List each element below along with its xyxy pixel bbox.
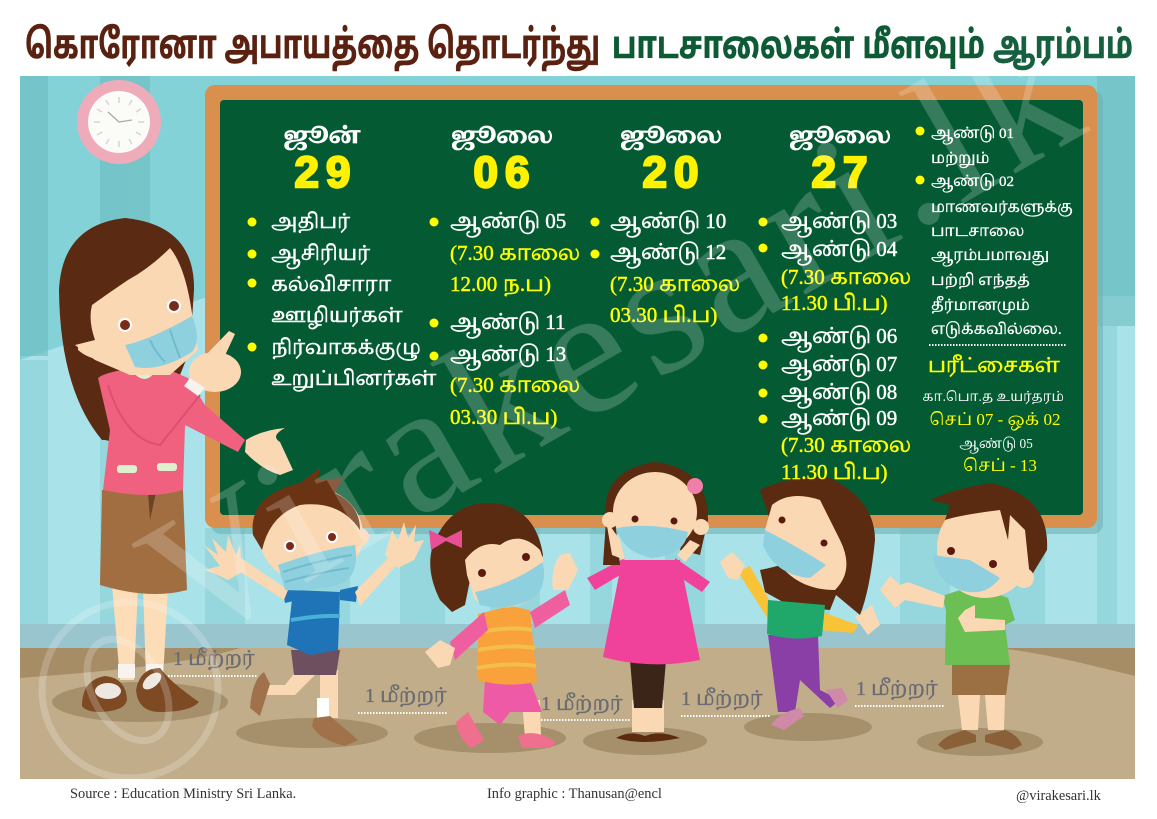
column: July 27: 11.30 பி.ப) — [781, 460, 888, 484]
girl with green shirt — [720, 478, 880, 741]
boy with green shirt — [880, 483, 1047, 756]
teacher — [52, 218, 293, 722]
distance markers: 1 metre: 1 மீற்றர் — [856, 677, 938, 700]
column: July 27: 11.30 பி.ப) — [781, 291, 888, 315]
side note: grades 1 and 2: மாணவர்களுக்கு — [931, 200, 1073, 216]
distance markers: 1 metre — [168, 647, 945, 720]
column: June 29: உறுப்பினர்கள் — [271, 368, 436, 392]
column: July 27: (7.30 காலை — [781, 265, 911, 289]
exams panel: கா.பொ.த உயர்தரம் — [922, 389, 1064, 405]
column: July 27 — [758, 123, 911, 484]
column: June 29: நிர்வாகக்குழு — [271, 337, 421, 362]
column: July 27: ஆண்டு 06 — [781, 324, 897, 353]
column: July 06: ஜூலை — [451, 123, 553, 150]
column: July 06: 06 — [474, 148, 536, 197]
column: July 06: (7.30 காலை — [450, 241, 580, 265]
column: June 29: ஆசிரியர் — [271, 243, 370, 270]
side note: grades 1 and 2: ஆரம்பமாவது — [931, 248, 1049, 267]
distance markers: 1 metre: 1 மீற்றர் — [173, 647, 255, 670]
side note: grades 1 and 2: மற்றும் — [931, 151, 989, 168]
chalkboard — [205, 85, 1103, 534]
side note: grades 1 and 2: பாடசாலை — [931, 224, 1024, 240]
exams panel: செப் 07 - ஒக் 02 — [929, 410, 1061, 432]
column: July 20: (7.30 காலை — [610, 272, 740, 296]
column: July 27: (7.30 காலை — [781, 433, 911, 457]
distance markers: 1 metre: 1 மீற்றர் — [365, 684, 447, 707]
column: June 29: ஜூன் — [283, 123, 361, 150]
exams panel: செப் - 13 — [963, 456, 1037, 475]
footer credits: Info graphic : Thanusan@encl — [487, 786, 662, 802]
column: July 06: ஆண்டு 13 — [450, 342, 566, 371]
column: July 06 — [430, 123, 580, 429]
distance markers: 1 metre: 1 மீற்றர் — [681, 687, 763, 710]
column: July 06: ஆண்டு 05 — [450, 209, 566, 238]
column: July 27: ஜூலை — [789, 123, 891, 150]
column: July 27: ஆண்டு 07 — [781, 352, 897, 381]
column: July 06: 12.00 ந.ப) — [450, 272, 551, 296]
column: July 27: ஆண்டு 04 — [781, 237, 898, 266]
exams panel — [922, 354, 1064, 475]
side note: grades 1 and 2: எடுக்கவில்லை. — [931, 321, 1062, 338]
exams panel: பரீட்சைகள் — [928, 354, 1060, 377]
side note: grades 1 and 2 — [916, 126, 1073, 345]
wall clock — [77, 80, 161, 164]
column: July 27: ஆண்டு 08 — [781, 380, 897, 409]
column: July 20: ஆண்டு 10 — [610, 209, 726, 238]
exams panel: ஆண்டு 05 — [959, 436, 1033, 454]
column: June 29: ஊழியர்கள் — [271, 305, 403, 330]
column: July 27: ஆண்டு 03 — [781, 209, 897, 238]
footer credits — [70, 786, 1102, 804]
column: July 06: ஆண்டு 11 — [450, 310, 565, 339]
column: June 29 — [248, 123, 436, 392]
column: July 06: 03.30 பி.ப) — [450, 405, 557, 429]
title — [25, 23, 1133, 72]
column: July 20: 03.30 பி.ப) — [610, 303, 717, 327]
column: July 20: 20 — [643, 148, 705, 197]
girl with orange top — [414, 503, 578, 753]
column: July 20 — [590, 123, 740, 327]
column: June 29: கல்விசாரா — [271, 274, 392, 296]
side note: grades 1 and 2: ஆண்டு 01 — [931, 126, 1014, 145]
side note: grades 1 and 2: ஆண்டு 02 — [931, 174, 1014, 193]
watermark: Virakesari.lk — [108, 0, 1112, 686]
side note: grades 1 and 2: தீர்மானமும் — [931, 297, 1030, 314]
column: July 27: 27 — [812, 148, 874, 197]
footer credits: @virakesari.lk — [1016, 788, 1102, 804]
column: June 29: 29 — [295, 148, 357, 197]
girl with pink dress — [583, 462, 710, 755]
title: கொரோனா அபாயத்தை தொடர்ந்து — [25, 23, 600, 71]
column: July 20: ஆண்டு 12 — [610, 240, 726, 269]
footer credits: Source : Education Ministry Sri Lanka. — [70, 786, 296, 802]
title: பாடசாலைகள் மீளவும் — [612, 25, 985, 69]
column: July 27: ஆண்டு 09 — [781, 406, 897, 435]
boy with blue shirt — [204, 468, 424, 748]
column: July 06: (7.30 காலை — [450, 373, 580, 397]
column: June 29: அதிபர் — [271, 211, 350, 233]
column: July 20: ஜூலை — [620, 123, 722, 150]
distance markers: 1 metre: 1 மீற்றர் — [541, 692, 623, 715]
side note: grades 1 and 2: பற்றி எந்தத் — [931, 272, 1030, 289]
